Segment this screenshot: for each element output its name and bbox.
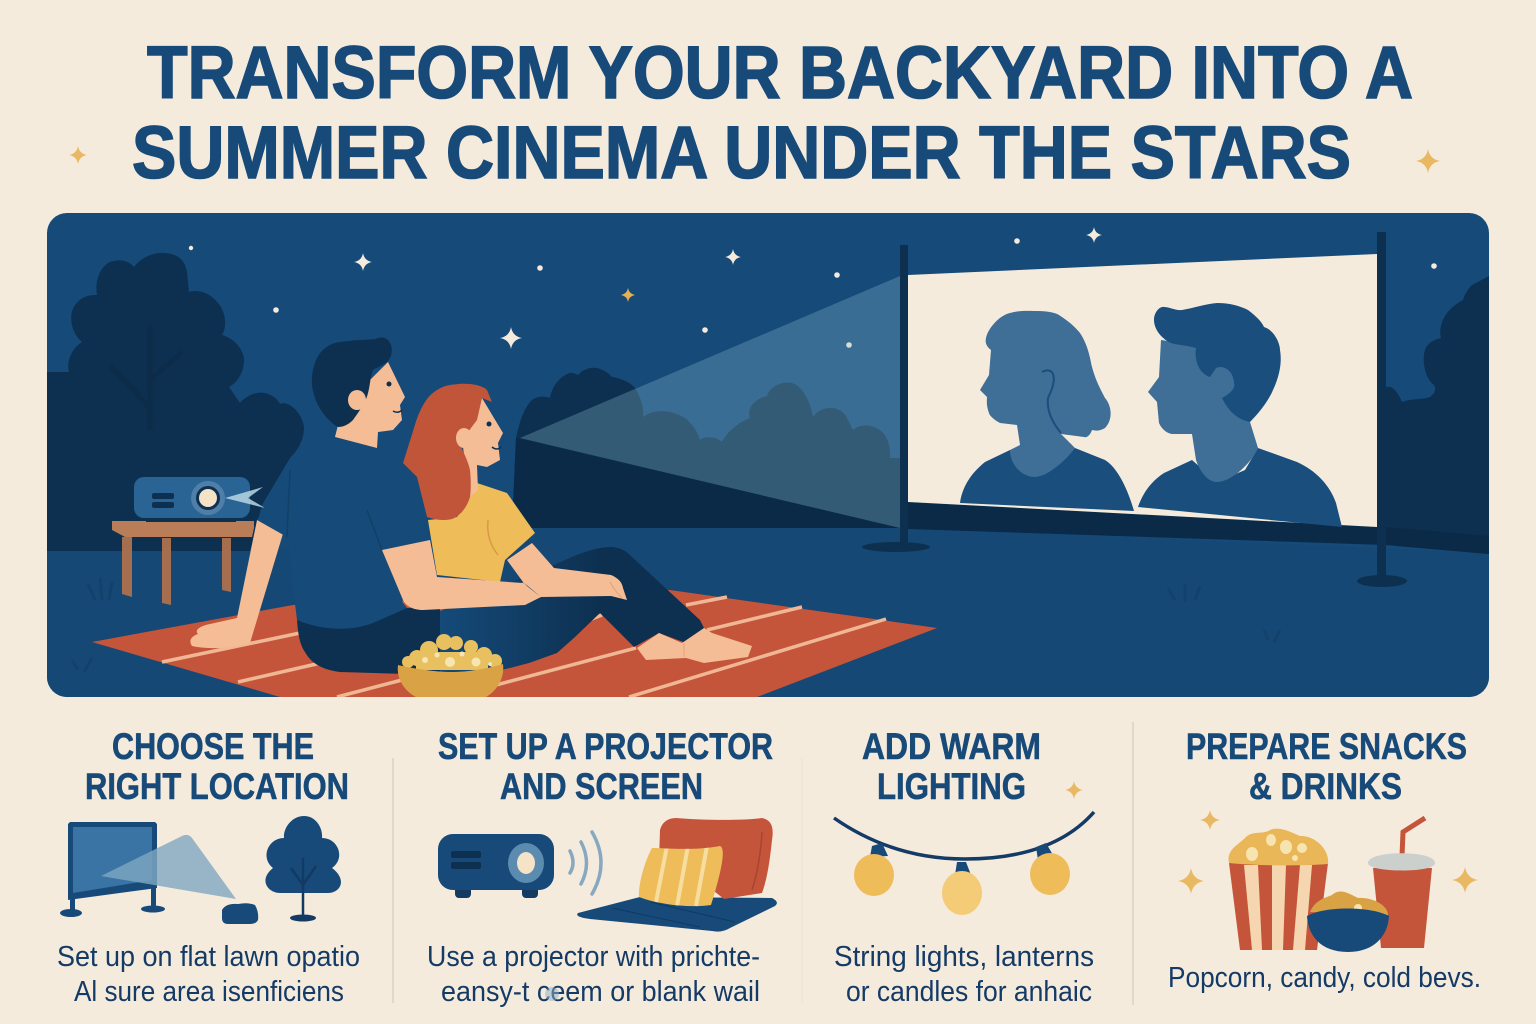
screen shadow band xyxy=(908,502,1489,554)
body text: Al sure area isenficiens xyxy=(74,976,344,1008)
middle trees xyxy=(512,368,905,528)
heading xyxy=(85,726,349,807)
heading: RIGHT LOCATION xyxy=(85,766,349,807)
icon: drink cup xyxy=(1368,818,1435,948)
man xyxy=(190,337,541,674)
woman xyxy=(403,384,752,674)
man shirt xyxy=(257,463,407,629)
grass tufts xyxy=(72,578,1280,672)
screen silhouette: man xyxy=(1138,303,1342,527)
heading: LIGHTING xyxy=(877,766,1026,807)
icon: title sparkle right xyxy=(1416,149,1440,173)
icon: title sparkle left xyxy=(69,146,87,164)
projector beam xyxy=(520,276,900,528)
body text: Use a projector with prichte- xyxy=(427,941,760,973)
dark area below beam xyxy=(512,438,900,528)
woman shirt xyxy=(428,483,535,582)
icon: snack bowl xyxy=(1307,892,1389,952)
man pants xyxy=(297,607,440,674)
heading: ADD WARM xyxy=(862,726,1041,767)
man face xyxy=(335,362,405,448)
heading: AND SCREEN xyxy=(500,766,703,807)
woman face xyxy=(462,398,503,497)
icon: popcorn box xyxy=(1229,829,1328,950)
panel: prepare snacks and drinks xyxy=(1168,726,1481,994)
body text: Popcorn, candy, cold bevs. xyxy=(1168,962,1481,994)
icon: blanket and pillows xyxy=(577,818,777,932)
right trees xyxy=(1386,276,1489,554)
panel: add warm lighting xyxy=(834,726,1094,1008)
stars xyxy=(189,227,1437,349)
title: SUMMER CINEMA UNDER THE STARS xyxy=(132,111,1351,194)
man front arm xyxy=(382,540,541,610)
smudge on text xyxy=(545,987,559,1001)
body text xyxy=(57,941,360,1008)
table xyxy=(112,521,254,605)
heading: & DRINKS xyxy=(1249,766,1402,807)
panel: backyard cinema scene xyxy=(47,213,1489,697)
rug xyxy=(92,590,937,697)
man hair xyxy=(312,337,392,427)
heading xyxy=(438,726,773,807)
woman feet xyxy=(637,628,752,663)
icon: screen and beam xyxy=(60,822,258,924)
body text xyxy=(427,941,760,1008)
projector xyxy=(134,477,265,522)
woman legs xyxy=(430,547,704,674)
woman hair xyxy=(403,384,492,520)
body text xyxy=(834,941,1094,1008)
ground xyxy=(47,677,1489,697)
outdoor screen xyxy=(908,254,1377,527)
body text: or candles for anhaic xyxy=(846,976,1092,1008)
body text: String lights, lanterns xyxy=(834,941,1094,973)
panel: set up a projector and screen xyxy=(427,726,777,1008)
icon: projector xyxy=(438,834,554,898)
icon: tree xyxy=(265,816,341,922)
title xyxy=(132,31,1413,194)
divider lines xyxy=(393,722,1133,1005)
heading xyxy=(1186,726,1467,807)
icon: sound waves xyxy=(570,832,601,894)
icon: sparkle xyxy=(1065,781,1083,799)
heading: SET UP A PROJECTOR xyxy=(438,726,773,767)
woman arm xyxy=(507,543,627,600)
icon: sparkles xyxy=(1178,810,1478,894)
panel: choose the right location xyxy=(57,726,360,1008)
body text: eansy-t ceem or blank wail xyxy=(441,976,760,1008)
left trees xyxy=(47,253,304,551)
body text: Set up on flat lawn opatio xyxy=(57,941,360,973)
title: TRANSFORM YOUR BACKYARD INTO A xyxy=(147,31,1413,114)
screen silhouette: woman xyxy=(960,311,1134,511)
icon: string lights xyxy=(834,812,1094,915)
screen posts xyxy=(862,232,1407,587)
heading: CHOOSE THE xyxy=(112,726,314,767)
man back arm xyxy=(190,520,285,648)
heading: PREPARE SNACKS xyxy=(1186,726,1467,767)
heading xyxy=(862,726,1041,807)
popcorn bowl xyxy=(398,634,503,697)
